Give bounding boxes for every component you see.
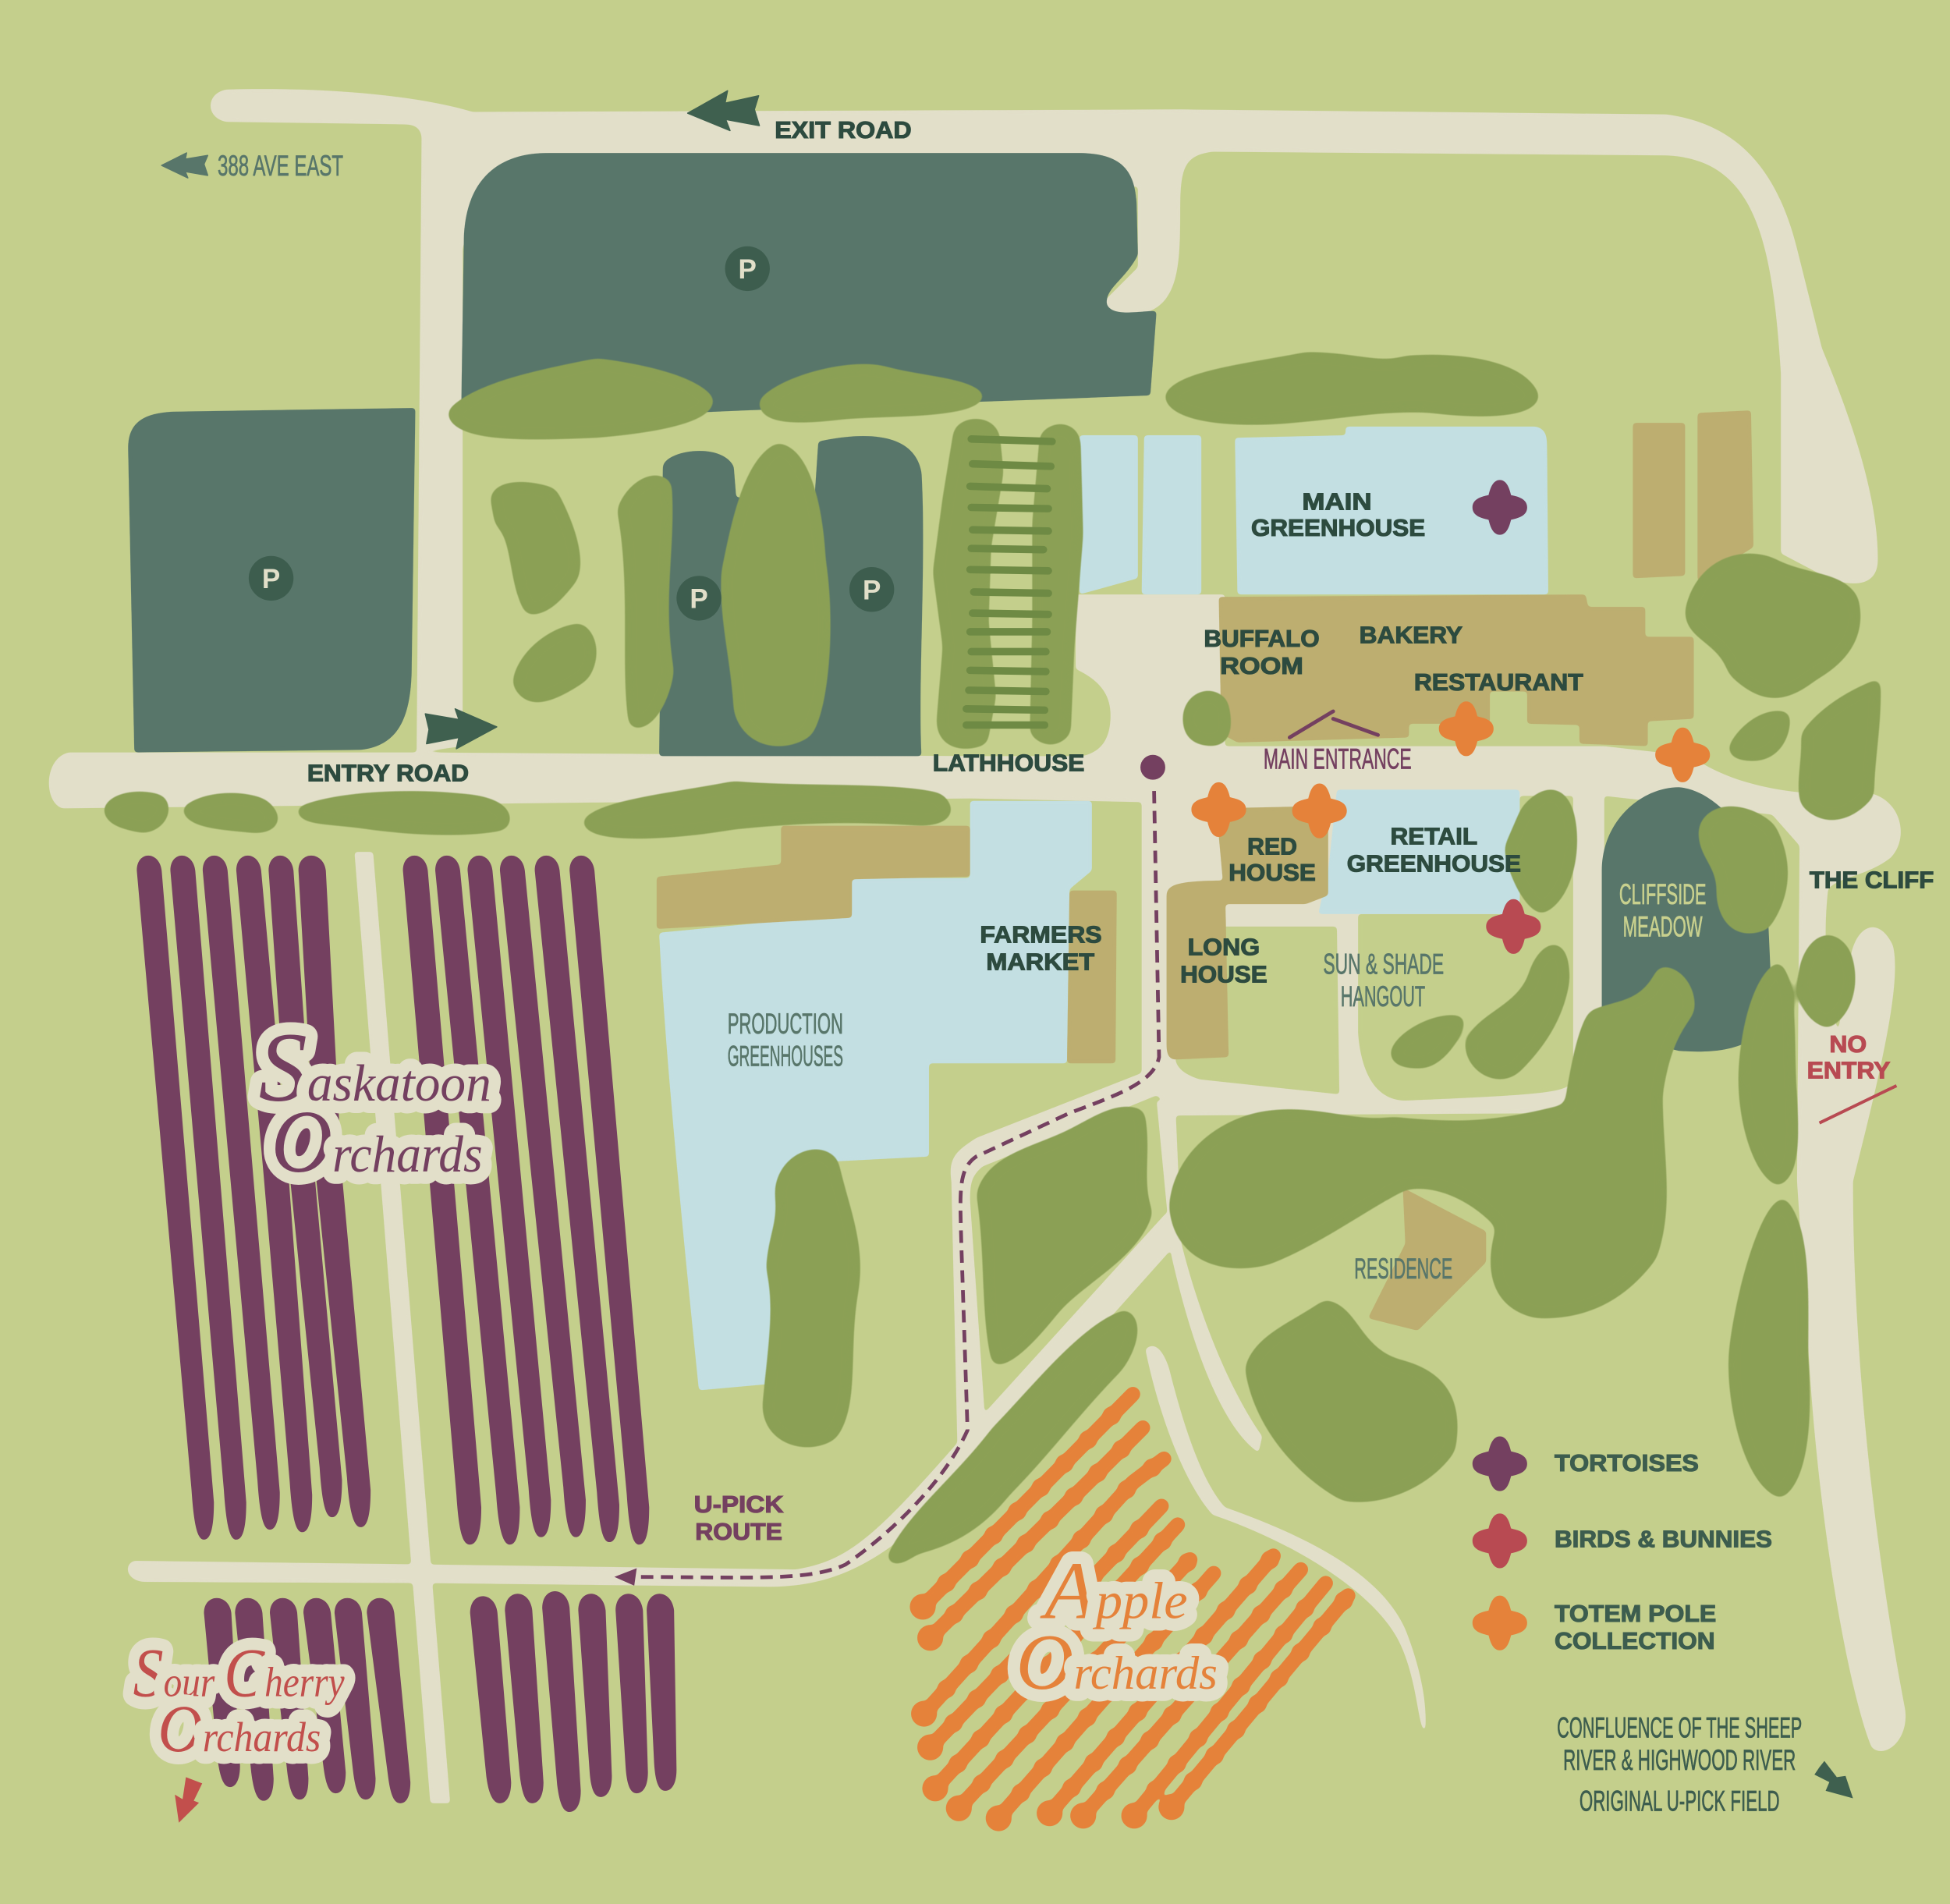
- bold labels: GREENHOUSE: [1347, 852, 1521, 878]
- bold labels: THE CLIFF: [1810, 867, 1934, 893]
- condensed labels: GREENHOUSES: [728, 1040, 843, 1072]
- bold labels: ROOM: [1220, 654, 1303, 679]
- legend: COLLECTION: [1555, 1629, 1715, 1654]
- parking markers: P: [739, 254, 757, 285]
- legend: [1473, 1437, 1772, 1654]
- lawns between roads: [1175, 796, 1573, 1101]
- parking markers: P: [863, 575, 881, 605]
- bold labels: U-PICK: [694, 1492, 784, 1518]
- bold labels: HOUSE: [1228, 860, 1316, 886]
- bold labels: MAIN: [1302, 490, 1372, 516]
- map markers: [1191, 480, 1710, 954]
- legend: TOTEM POLE: [1555, 1601, 1716, 1627]
- cliffside meadow: [1602, 787, 1772, 1051]
- apple orchard rows: [923, 1394, 1348, 1818]
- apple orchards title: Orchards: [1016, 1619, 1218, 1707]
- condensed labels: MAIN ENTRANCE: [1264, 743, 1412, 775]
- condensed labels: CLIFFSIDE: [1619, 878, 1706, 910]
- bold labels: GREENHOUSE: [1251, 516, 1425, 541]
- sour cherry orchards title: Sour Cherry: [133, 1635, 345, 1712]
- bold labels: ROUTE: [695, 1519, 782, 1545]
- bold labels: RED: [1247, 834, 1297, 860]
- arrows: [161, 90, 1853, 1823]
- main entrance marks: [1289, 711, 1378, 737]
- bold labels: ENTRY ROAD: [307, 761, 469, 786]
- no entry line: [1820, 1086, 1896, 1123]
- bold labels: RESTAURANT: [1414, 670, 1583, 696]
- buildings: [657, 410, 1753, 1331]
- condensed labels: [218, 150, 1802, 1817]
- condensed labels: ORIGINAL U-PICK FIELD: [1580, 1785, 1780, 1817]
- condensed labels: HANGOUT: [1341, 980, 1425, 1012]
- bold labels: NO: [1829, 1032, 1867, 1058]
- condensed labels: SUN & SHADE: [1323, 948, 1444, 980]
- saskatoon orchards title: Orchards: [271, 1092, 483, 1191]
- bold labels: ENTRY: [1807, 1058, 1890, 1083]
- greenhouses: [659, 427, 1548, 1391]
- bold labels: BUFFALO: [1204, 626, 1320, 652]
- parking markers: [249, 246, 894, 621]
- sour cherry orchards title: Orchards: [158, 1691, 321, 1766]
- saskatoon orchard rows: [136, 856, 649, 1544]
- legend: TORTOISES: [1555, 1451, 1699, 1477]
- sour cherry orchard rows: [204, 1591, 676, 1812]
- condensed labels: PRODUCTION: [728, 1008, 843, 1040]
- trees: [103, 352, 1881, 1564]
- bold labels: LONG: [1188, 934, 1260, 960]
- bold labels: LATHHOUSE: [933, 751, 1084, 777]
- condensed labels: MEADOW: [1623, 911, 1703, 943]
- bold labels: MARKET: [986, 950, 1095, 976]
- bold labels: BAKERY: [1360, 622, 1462, 648]
- condensed labels: 388 AVE EAST: [218, 150, 343, 182]
- condensed labels: RIVER & HIGHWOOD RIVER: [1563, 1744, 1796, 1776]
- saskatoon orchards title: [259, 1012, 491, 1191]
- condensed labels: RESIDENCE: [1354, 1253, 1452, 1285]
- bold labels: RETAIL: [1391, 824, 1477, 850]
- bold labels: EXIT ROAD: [775, 118, 912, 144]
- apple orchards title: [1016, 1544, 1218, 1707]
- u-pick route: [615, 755, 1165, 1586]
- saskatoon orchards title: Saskatoon: [259, 1012, 491, 1122]
- bold labels: [307, 118, 1934, 1545]
- bold labels: FARMERS: [980, 923, 1102, 948]
- sour cherry orchards title: [133, 1635, 345, 1766]
- parking lots: [128, 153, 1157, 756]
- legend: BIRDS & BUNNIES: [1555, 1526, 1772, 1552]
- apple orchards title: Apple: [1040, 1544, 1188, 1636]
- lathhouse ribs: [966, 439, 1052, 725]
- bold labels: HOUSE: [1180, 963, 1268, 988]
- parking markers: P: [262, 564, 280, 594]
- parking markers: P: [690, 584, 708, 615]
